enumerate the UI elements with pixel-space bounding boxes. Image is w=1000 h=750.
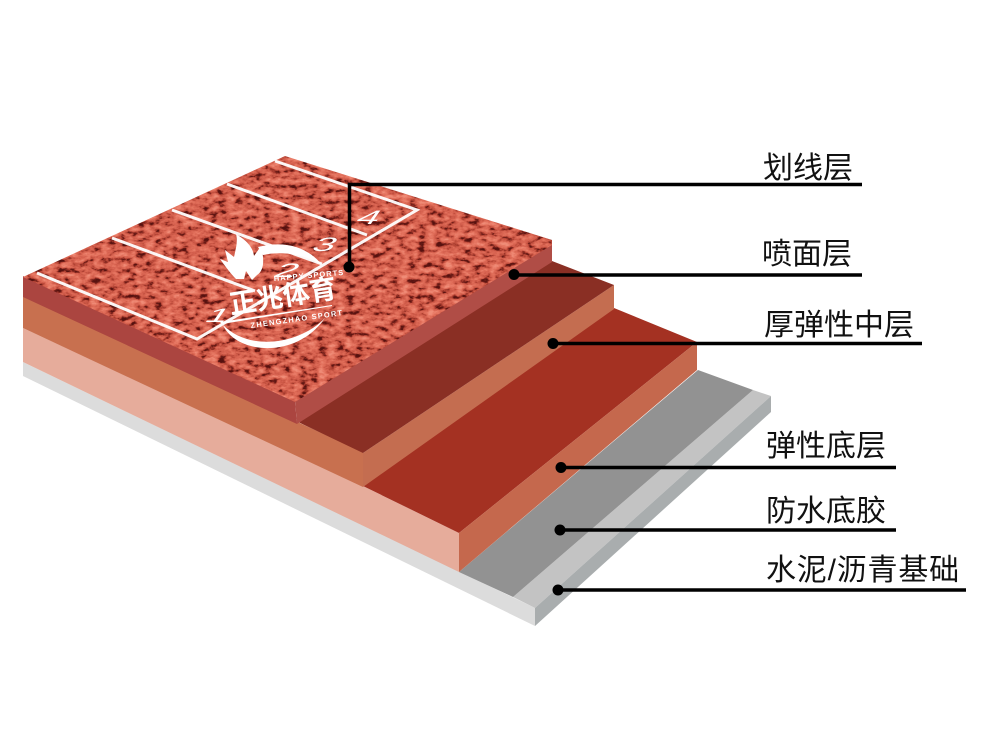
logo: underline stroke [220,305,332,324]
lane numbers: 4 [351,206,388,228]
callout: thick elastic middle layer [548,309,922,349]
callout: cement/asphalt foundation [552,554,966,596]
layer: waterproof primer [459,370,753,597]
callout: thick elastic middle layer: 厚弹性中层 [764,309,914,342]
lane markings [37,161,417,339]
layer: textured spray surface [23,156,552,402]
callout: spray layer: 喷面层 [762,238,852,271]
logo: pinyin name: ZHENGZHAO SPORT [250,308,344,330]
callout: cement/asphalt foundation: 水泥/沥青基础 [766,554,960,587]
logo: flame [220,234,263,280]
layer: elastic base [23,308,697,572]
callout: marking layer: 划线层 [763,152,853,185]
callout: elastic base layer: 弹性底层 [766,430,886,463]
lane numbers: 1 [200,304,237,326]
logo: brand name: 正兆体育 [227,273,339,320]
callout: spray layer [508,238,862,280]
layer: spray coating side [23,244,552,424]
lane numbers: 2 [269,259,306,281]
callout: waterproof primer [554,495,896,536]
callout: waterproof primer: 防水底胶 [766,495,886,528]
callout: elastic base layer [556,430,896,473]
layer: thick elastic middle [23,261,614,487]
layer: cement/asphalt base [23,362,771,626]
logo: upper swoosh [258,244,322,265]
logo: small slogan: HAPPY SPORTS [273,268,345,283]
lane numbers [200,206,388,326]
logo [220,234,345,348]
lane numbers: 3 [307,233,344,255]
callout: marking layer [344,152,862,272]
logo: lower swoosh [223,318,325,348]
